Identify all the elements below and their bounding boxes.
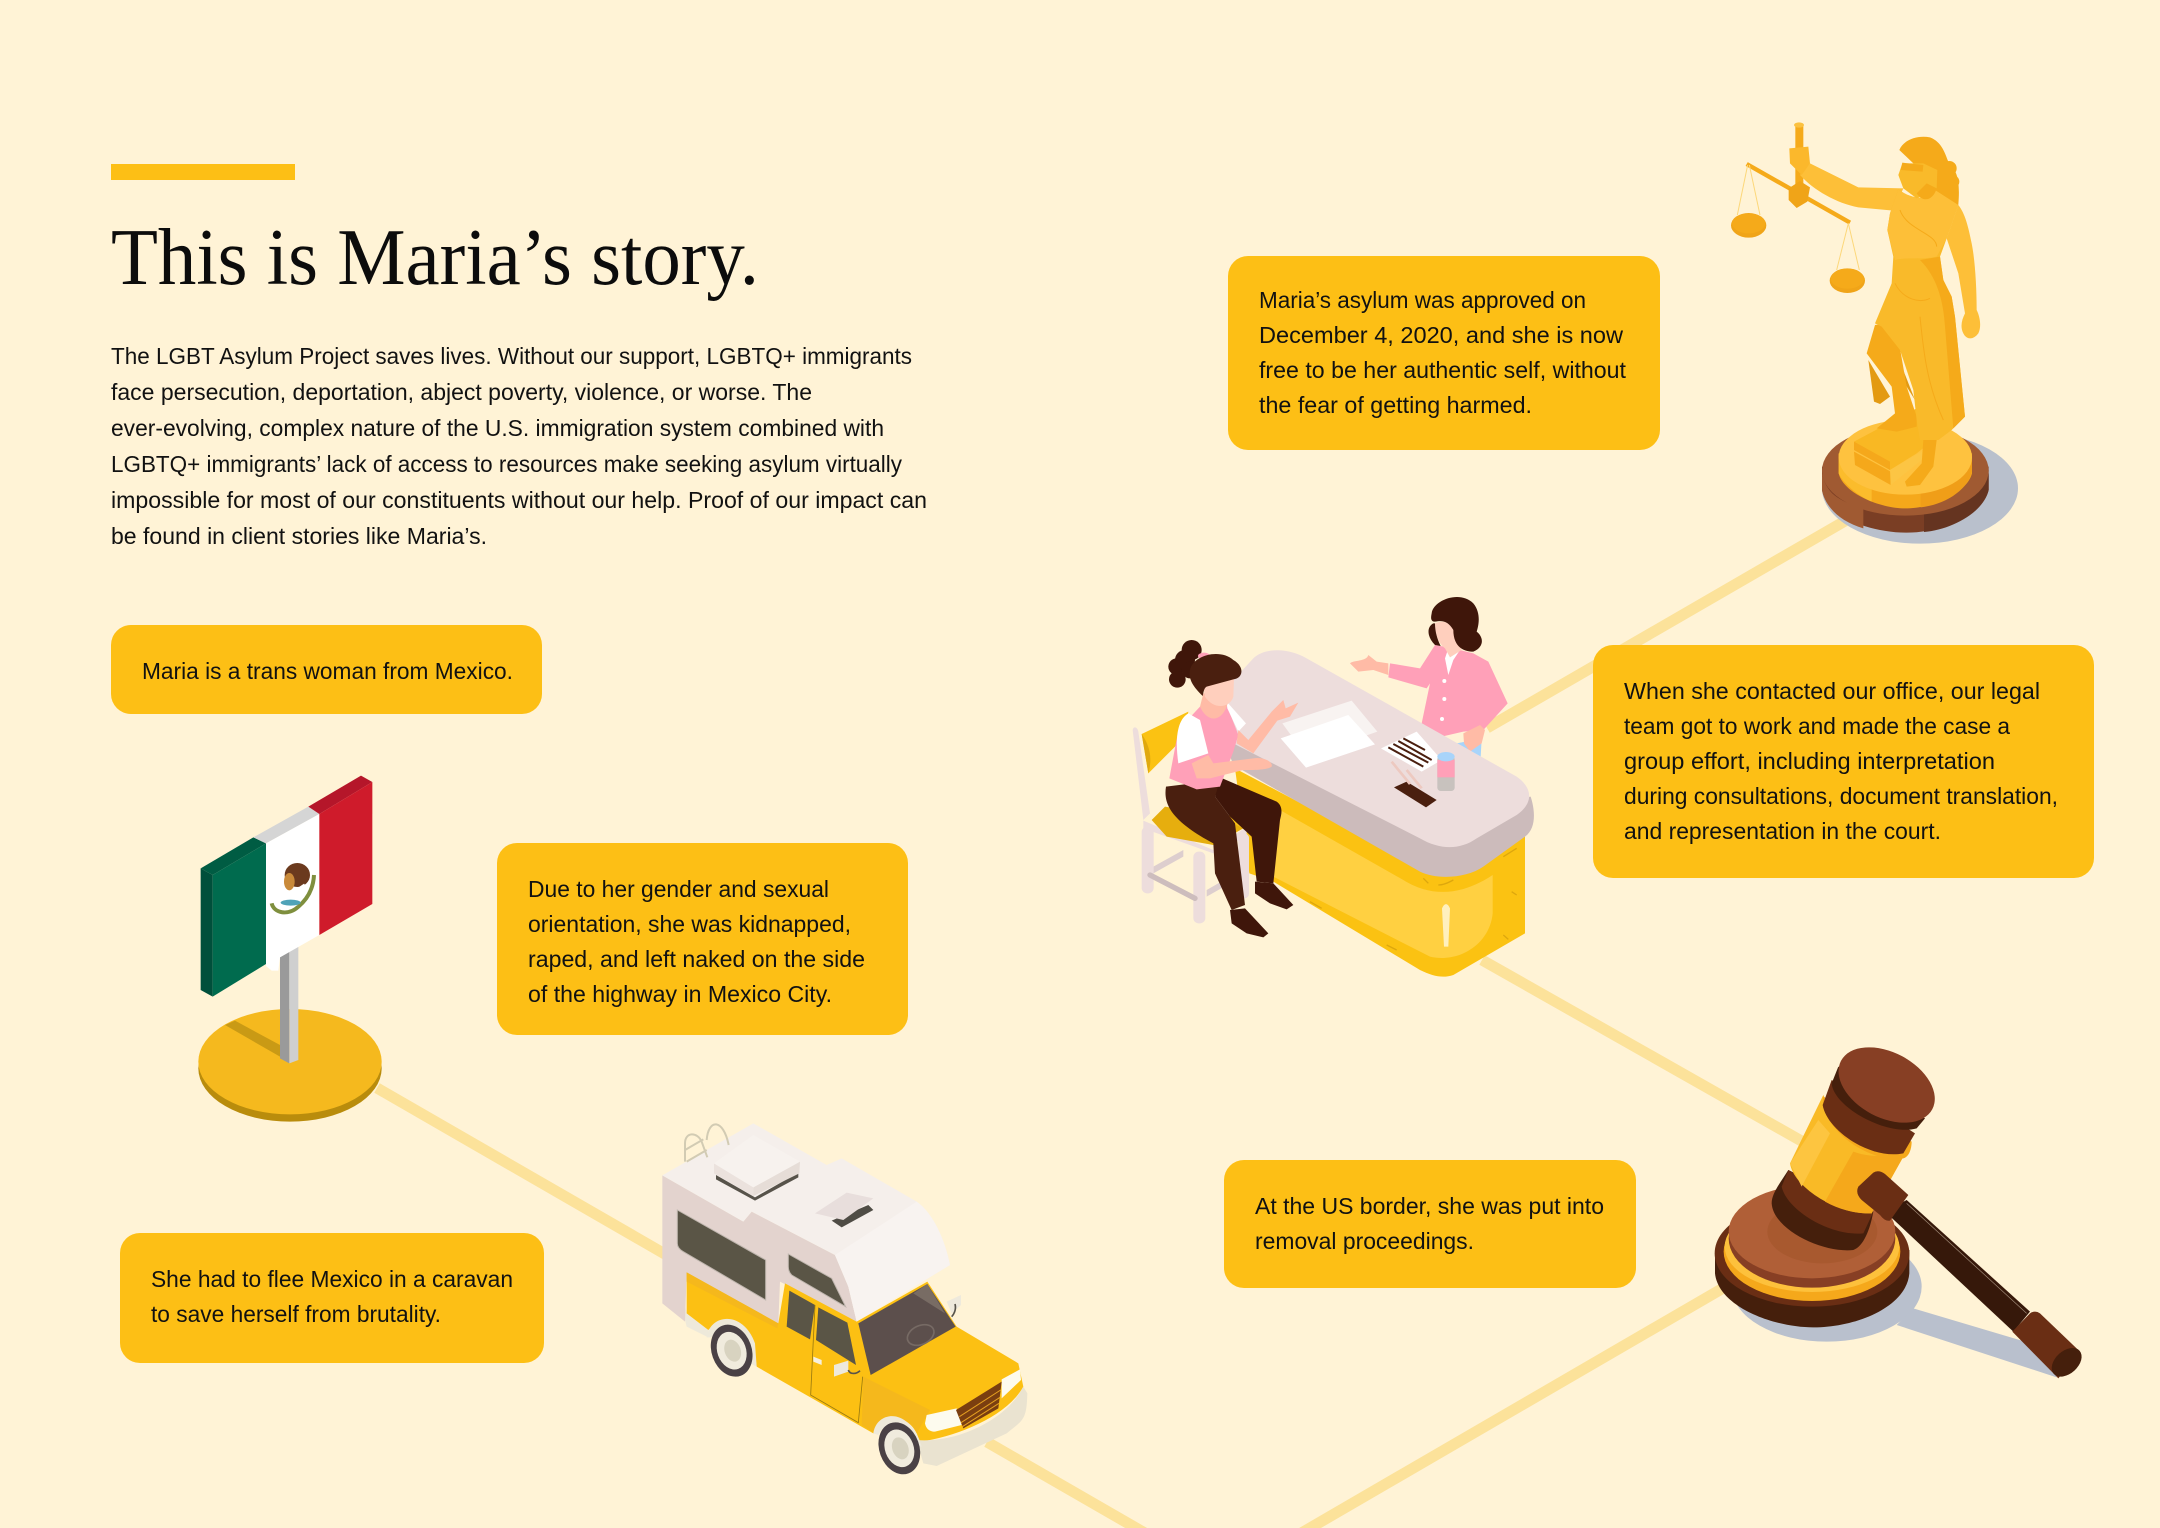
intro paragraph bbox=[111, 343, 927, 549]
icon: camper truck bbox=[662, 1123, 1027, 1480]
figure bbox=[1789, 137, 1980, 487]
callout: removal proceedings: removal proceedings. bbox=[1255, 1228, 1474, 1254]
callout: kidnapped: Due to her gender and sexual bbox=[528, 876, 829, 902]
callout: legal team: When she contacted our office, our legal bbox=[1624, 678, 2040, 704]
callout: asylum approved: December 4, 2020, and she is now bbox=[1259, 322, 1623, 348]
callout: flee in a caravan bbox=[120, 1233, 544, 1363]
callout: asylum approved bbox=[1228, 256, 1660, 450]
callout: trans woman from Mexico: Maria is a trans woman from Mexico. bbox=[142, 658, 513, 684]
intro paragraph: The LGBT Asylum Project saves lives. Without our support, LGBTQ+ immigrants bbox=[111, 343, 912, 369]
icon: consultation at a desk bbox=[1133, 597, 1534, 977]
books bbox=[1854, 408, 1933, 485]
accent bar bbox=[111, 164, 295, 180]
callout: kidnapped bbox=[497, 843, 908, 1035]
desk bbox=[1222, 650, 1534, 977]
icon: gavel on sound block bbox=[1715, 1032, 2087, 1382]
intro paragraph: ever-evolving, complex nature of the U.S. immigration system combined with bbox=[111, 415, 884, 441]
callout: kidnapped: raped, and left naked on the side bbox=[528, 946, 865, 972]
callout: removal proceedings: At the US border, she was put into bbox=[1255, 1193, 1604, 1219]
intro paragraph: LGBTQ+ immigrants’ lack of access to resources make seeking asylum virtually bbox=[111, 451, 902, 477]
intro paragraph: be found in client stories like Maria’s. bbox=[111, 523, 487, 549]
callout: legal team bbox=[1593, 645, 2094, 878]
chair bbox=[1133, 712, 1249, 923]
callout: asylum approved: free to be her authentic self, without bbox=[1259, 357, 1627, 383]
callout: flee in a caravan: to save herself from brutality. bbox=[151, 1301, 441, 1327]
callout: legal team: during consultations, document translation, bbox=[1624, 783, 2058, 809]
intro paragraph: impossible for most of our constituents without our help. Proof of our impact can bbox=[111, 487, 927, 513]
callout: asylum approved: the fear of getting harmed. bbox=[1259, 392, 1532, 418]
icon: Lady Justice statue bbox=[1731, 122, 2018, 544]
callout: legal team: team got to work and made the case a bbox=[1624, 713, 2010, 739]
callout: kidnapped: of the highway in Mexico City. bbox=[528, 981, 832, 1007]
person standing bbox=[1350, 597, 1508, 757]
callout: legal team: group effort, including interpretation bbox=[1624, 748, 1995, 774]
callout: kidnapped: orientation, she was kidnapped, bbox=[528, 911, 851, 937]
scales and sword bbox=[1731, 122, 1865, 293]
callout: trans woman from Mexico bbox=[111, 625, 542, 714]
callout: legal team: and representation in the court. bbox=[1624, 818, 1941, 844]
person sitting bbox=[1165, 640, 1298, 937]
icon: Mexican flag on round base bbox=[198, 776, 382, 1122]
title: This is Maria’s story. bbox=[111, 214, 759, 302]
callout: asylum approved: Maria’s asylum was approved on bbox=[1259, 287, 1586, 313]
intro paragraph: face persecution, deportation, abject poverty, violence, or worse. The bbox=[111, 379, 812, 405]
callout: flee in a caravan: She had to flee Mexico in a caravan bbox=[151, 1266, 513, 1292]
callout: removal proceedings bbox=[1224, 1160, 1636, 1288]
